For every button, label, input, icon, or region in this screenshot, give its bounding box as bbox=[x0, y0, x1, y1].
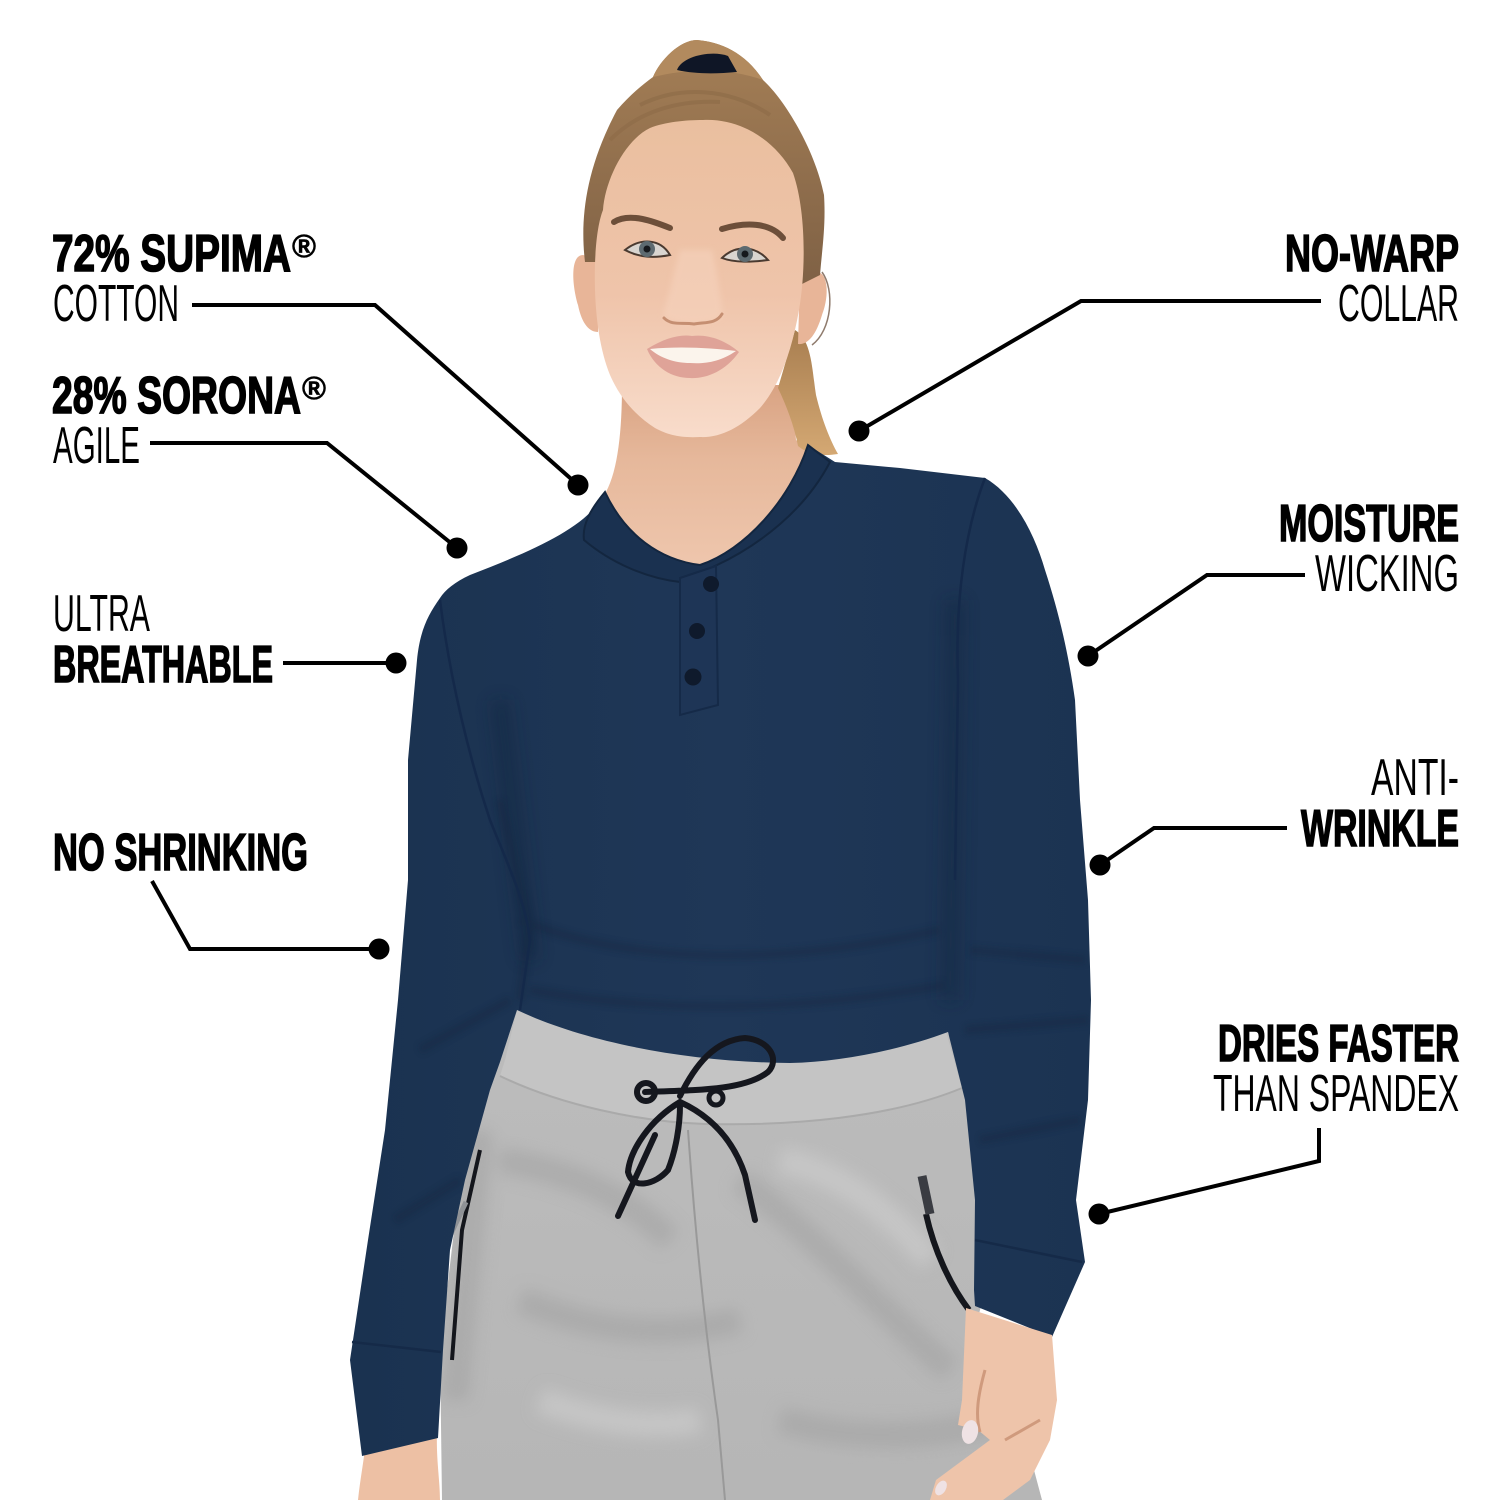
callout: dries faster than spandex bbox=[1088, 1015, 1459, 1224]
callout: 72% Supima cotton: COTTON bbox=[53, 275, 179, 333]
callout: 28% Sorona agile bbox=[52, 367, 468, 558]
zippers bbox=[448, 1150, 969, 1360]
right hand bbox=[930, 1308, 1057, 1500]
callout: 28% Sorona agile: AGILE bbox=[53, 417, 140, 475]
mouth bbox=[647, 336, 739, 378]
callout: 28% Sorona agile: 28% SORONA bbox=[52, 367, 301, 425]
navy henley shirt bbox=[350, 445, 1091, 1456]
eyebrows bbox=[614, 218, 783, 238]
shirt folds bbox=[498, 798, 948, 990]
callout: no shrinking bbox=[53, 824, 390, 960]
left hand bbox=[358, 1430, 440, 1500]
callout: moisture wicking bbox=[1078, 495, 1459, 666]
callout: 72% Supima cotton bbox=[52, 225, 588, 496]
hair tie bbox=[677, 54, 737, 73]
figure: woman wearing navy henley and grey joggers bbox=[350, 40, 1091, 1500]
callout: ultra breathable bbox=[53, 585, 406, 694]
callout: 72% Supima cotton: 72% SUPIMA bbox=[52, 225, 291, 283]
collar bbox=[584, 445, 830, 582]
fingernails bbox=[933, 1419, 980, 1497]
hair ponytail bbox=[778, 330, 838, 455]
callout: ultra breathable: BREATHABLE bbox=[53, 636, 273, 694]
joggers bbox=[440, 1005, 1042, 1500]
neck bbox=[606, 385, 808, 572]
hair bbox=[583, 40, 825, 285]
nose bbox=[663, 250, 722, 324]
callout: ultra breathable: ULTRA bbox=[53, 585, 150, 643]
callout: anti-wrinkle bbox=[1090, 749, 1459, 876]
callout: 72% Supima cotton: ® bbox=[292, 228, 316, 264]
callout: no-warp collar bbox=[848, 225, 1459, 442]
placket and buttons bbox=[680, 566, 719, 715]
ears bbox=[573, 255, 830, 345]
callout: no shrinking: NO SHRINKING bbox=[53, 824, 308, 882]
face bbox=[595, 120, 804, 437]
drawstring bbox=[618, 1038, 773, 1220]
eyes bbox=[625, 241, 768, 262]
callout: 28% Sorona agile: ® bbox=[302, 370, 326, 406]
